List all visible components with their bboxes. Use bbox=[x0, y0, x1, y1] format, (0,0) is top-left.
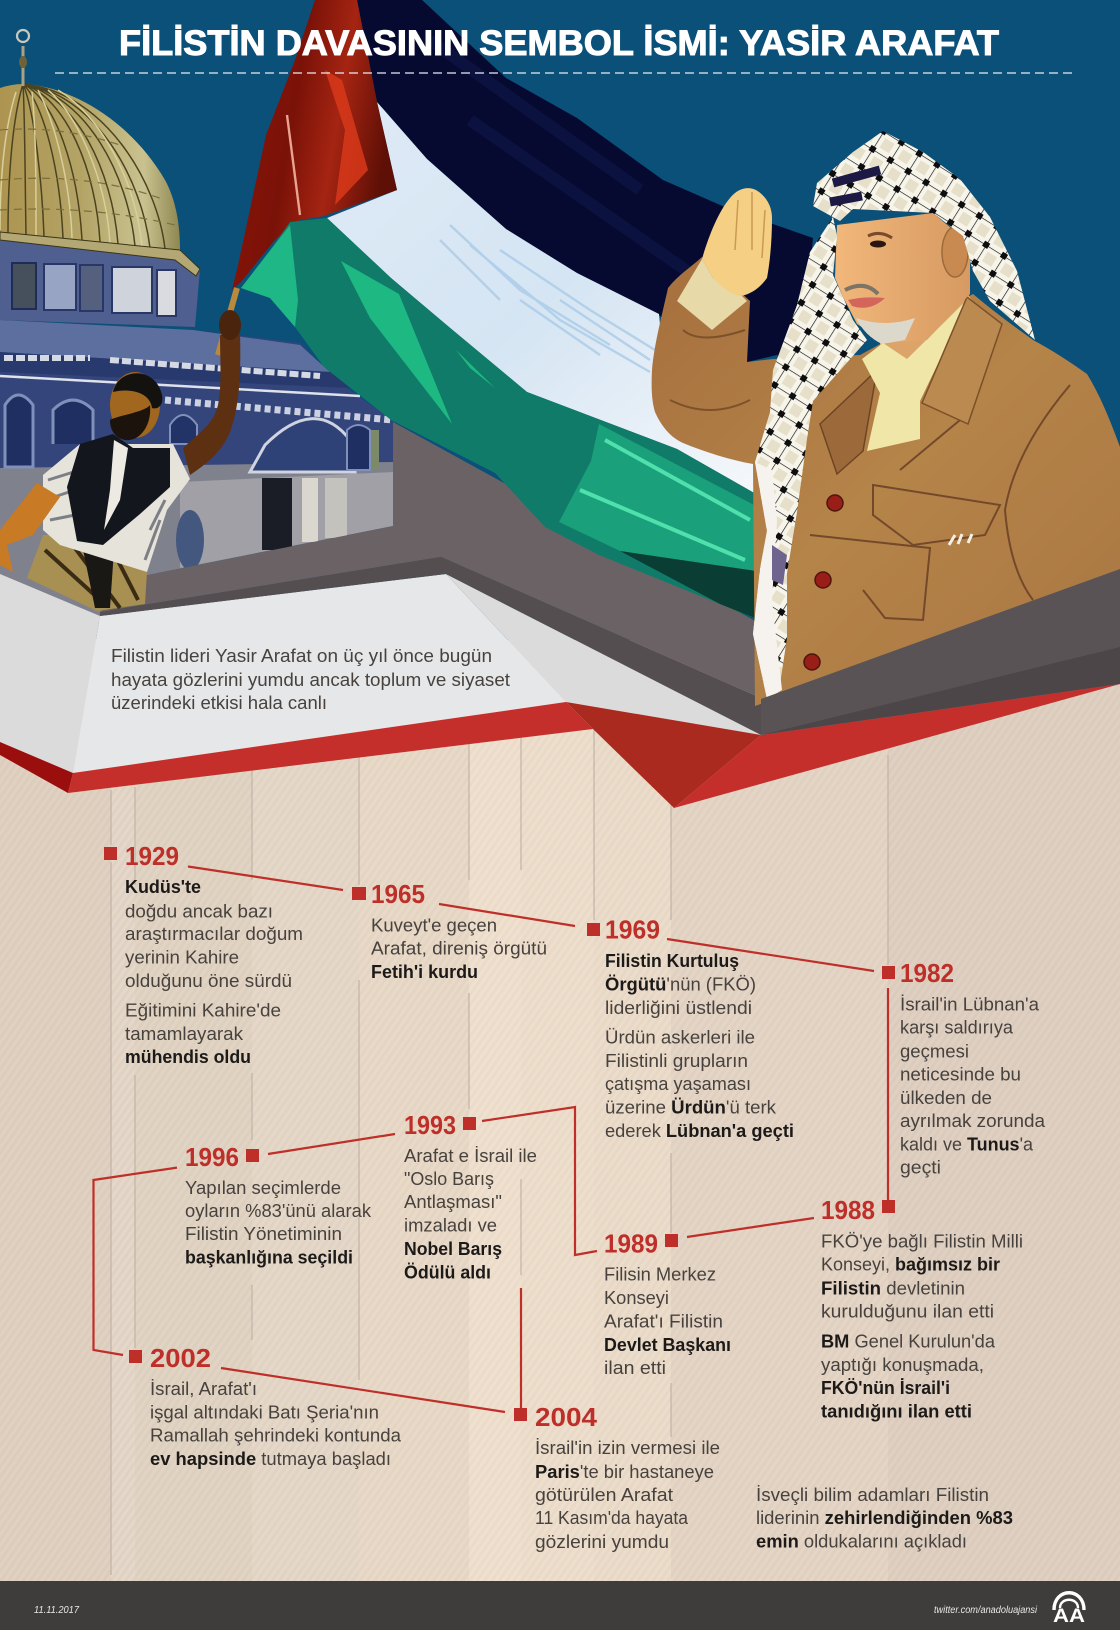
timeline event: 1988: Filistin devletinin bbox=[821, 1278, 965, 1298]
timeline event: 1989: 1989 bbox=[604, 1228, 658, 1258]
timeline event: 1929: tamamlayarak bbox=[125, 1024, 244, 1044]
timeline event: 2004: gözlerini yumdu bbox=[535, 1532, 669, 1552]
timeline event: 1982: geçti bbox=[900, 1158, 941, 1178]
timeline event: 1988: BM Genel Kurulun'da bbox=[821, 1332, 996, 1352]
timeline event: 1982: İsrail'in Lübnan'a bbox=[900, 994, 1040, 1014]
intro text: üzerindeki etkisi hala canlı bbox=[111, 693, 327, 713]
portrait: raised hand bbox=[702, 188, 772, 296]
timeline event: 1982: karşı saldırıya bbox=[900, 1018, 1014, 1038]
text block: Swedish scientists note: İsveçli bilim adamları Filistin bbox=[756, 1485, 989, 1505]
timeline event: 1993: Antlaşması" bbox=[404, 1192, 502, 1212]
timeline event: 2004: İsrail'in izin vermesi ile bbox=[535, 1438, 720, 1458]
text block: Swedish scientists note: emin oldukalarını açıkladı bbox=[756, 1532, 967, 1552]
timeline event: 1989 bbox=[604, 1228, 731, 1378]
background: blue sky bbox=[0, 0, 1120, 760]
timeline event: 1982 bbox=[882, 958, 1046, 1178]
illustration: Palestinian flag bbox=[232, 0, 813, 625]
footer bar bbox=[0, 1581, 1120, 1630]
icon: Anadolu Agency logo: AA bbox=[1053, 1606, 1085, 1627]
timeline event: 1969: Filistin Kurtuluş bbox=[605, 951, 739, 971]
timeline event: 2002: ev hapsinde tutmaya başladı bbox=[150, 1449, 391, 1469]
man: flag pole bbox=[218, 288, 237, 355]
timeline event: 2004: Paris'te bir hastaneye bbox=[535, 1462, 714, 1482]
timeline event: 1993: Ödülü aldı bbox=[404, 1262, 491, 1282]
man: trousers bbox=[27, 535, 147, 611]
timeline event: 1982: neticesinde bu bbox=[900, 1064, 1021, 1084]
timeline event: 1993 bbox=[404, 1110, 537, 1282]
timeline event: 1969: Örgütü'nün (FKÖ) bbox=[605, 974, 756, 994]
portrait: keffiyeh top bbox=[813, 131, 1035, 340]
portrait: left lapel bbox=[820, 370, 877, 474]
timeline event: 1969: üzerine Ürdün'ü terk bbox=[605, 1098, 777, 1118]
timeline event: 1965: 1965 bbox=[371, 879, 425, 909]
timeline event: 1989: Devlet Başkanı bbox=[604, 1335, 731, 1355]
timeline event: 1988: 1988 bbox=[821, 1195, 875, 1225]
timeline event: 1965: Arafat, direniş örgütü bbox=[371, 938, 547, 958]
portrait: buttons bbox=[827, 495, 843, 511]
timeline event: 1988: kurulduğunu ilan etti bbox=[821, 1302, 994, 1322]
timeline event: 1989: Filisin Merkez bbox=[604, 1264, 716, 1284]
intro text: Filistin lideri Yasir Arafat on üç yıl önce bugün bbox=[111, 646, 492, 666]
timeline event: 1989: Konseyi bbox=[604, 1288, 669, 1308]
wall: dark band left bbox=[100, 557, 761, 735]
timeline event: 1989: ilan etti bbox=[604, 1358, 666, 1378]
timeline connector lines bbox=[94, 866, 888, 1412]
timeline event: 1929 bbox=[104, 841, 303, 1067]
timeline event: 2004 bbox=[514, 1402, 720, 1552]
title: FİLİSTİN DAVASININ SEMBOL İSMİ: YASİR ARAFAT bbox=[119, 24, 999, 63]
timeline event: 2004: götürülen Arafat bbox=[535, 1485, 673, 1505]
timeline event: 1965 bbox=[352, 879, 547, 982]
illustration: golden dome bbox=[0, 84, 200, 276]
timeline event: 1929: olduğunu öne sürdü bbox=[125, 971, 292, 991]
timeline event: 1988: FKÖ'nün İsrail'i bbox=[821, 1378, 950, 1398]
man: black vest bbox=[67, 434, 170, 545]
intro text: hayata gözlerini yumdu ancak toplum ve siyaset bbox=[111, 670, 510, 690]
timeline event: 2004: 2004 bbox=[535, 1402, 598, 1432]
timeline event: 1929: Eğitimini Kahire'de bbox=[125, 1000, 281, 1020]
portrait: jacket seams and pockets bbox=[810, 325, 1070, 620]
timeline event: 1982: ayrılmak zorunda bbox=[900, 1111, 1046, 1131]
ribbon: red folded band bbox=[0, 684, 1120, 808]
timeline event: 1965: Kuveyt'e geçen bbox=[371, 916, 497, 936]
timeline event: 1969: ederek Lübnan'a geçti bbox=[605, 1121, 794, 1141]
portrait: right lapel bbox=[922, 297, 1002, 424]
man: striped shirt bbox=[43, 444, 190, 572]
footer: date: 11.11.2017 bbox=[34, 1605, 79, 1616]
timeline event: 1996: oyların %83'ünü alarak bbox=[185, 1201, 372, 1221]
portrait: face bbox=[835, 213, 970, 343]
illustration: dome drum with tile panels bbox=[0, 232, 200, 327]
icon: Anadolu Agency logo bbox=[1053, 1593, 1085, 1627]
timeline event: 2004: 11 Kasım'da hayata bbox=[535, 1508, 689, 1528]
portrait: agal cord bbox=[830, 170, 880, 202]
timeline event: 1988 bbox=[821, 1195, 1023, 1422]
panel: white intro panel bbox=[0, 574, 761, 773]
timeline event: 1969: liderliğini üstlendi bbox=[605, 998, 752, 1018]
timeline event: 1993: imzaladı ve bbox=[404, 1216, 497, 1236]
portrait: ear bbox=[942, 227, 968, 277]
timeline event: 1982: geçmesi bbox=[900, 1042, 969, 1062]
portrait: jacket bbox=[652, 257, 1120, 706]
flag: black band bbox=[357, 0, 813, 370]
timeline event: 1988: tanıdığını ilan etti bbox=[821, 1402, 972, 1422]
intro text bbox=[111, 646, 510, 713]
man: head and beard bbox=[110, 372, 160, 438]
timeline event: 2002: 2002 bbox=[150, 1343, 211, 1373]
icon: dome finial with crescent bbox=[17, 30, 29, 86]
timeline event: 1929: Kudüs'te bbox=[125, 877, 201, 897]
background: beige striped timeline panel bbox=[0, 640, 1120, 1585]
timeline event: 1965: Fetih'i kurdu bbox=[371, 962, 478, 982]
portrait: shirt bbox=[862, 297, 970, 451]
timeline event: 1929: doğdu ancak bazı bbox=[125, 902, 273, 922]
timeline event: 1993: Arafat e İsrail ile bbox=[404, 1146, 537, 1166]
timeline event: 1969: çatışma yaşaması bbox=[605, 1074, 751, 1094]
timeline event: 1929: mühendis oldu bbox=[125, 1047, 251, 1067]
wall: dark band right bbox=[761, 569, 1120, 735]
timeline event: 1929: araştırmacılar doğum bbox=[125, 924, 303, 944]
timeline event: 1988: yaptığı konuşmada, bbox=[821, 1355, 984, 1375]
flag: white band bbox=[327, 102, 770, 494]
flag: green band bbox=[241, 218, 770, 625]
timeline event: 1982: ülkeden de bbox=[900, 1088, 992, 1108]
man: raised arm bbox=[183, 333, 240, 475]
portrait: Yasser Arafat bbox=[652, 131, 1120, 706]
timeline event: 1993: "Oslo Barış bbox=[404, 1169, 494, 1189]
timeline event: 1988: Konseyi, bağımsız bir bbox=[821, 1254, 1000, 1274]
portrait: keffiyeh falling scarf bbox=[753, 217, 867, 699]
timeline event: 1996: 1996 bbox=[185, 1142, 239, 1172]
timeline event: 1996: başkanlığına seçildi bbox=[185, 1248, 353, 1268]
timeline event: 1969: Ürdün askerleri ile bbox=[605, 1028, 755, 1048]
timeline event: 1989: Arafat'ı Filistin bbox=[604, 1312, 723, 1332]
portrait: beard bbox=[856, 318, 915, 344]
illustration: mosque building bbox=[0, 320, 393, 622]
timeline event: 1993: 1993 bbox=[404, 1110, 456, 1140]
text block: Swedish scientists note bbox=[756, 1485, 1013, 1552]
man: lowered arm bbox=[0, 483, 60, 572]
timeline event: 1996: Filistin Yönetiminin bbox=[185, 1224, 342, 1244]
illustration: man waving the flag bbox=[0, 288, 241, 611]
text block: Swedish scientists note: liderinin zehirlendiğinden %83 bbox=[756, 1508, 1013, 1528]
timeline event: 1982: kaldı ve Tunus'a bbox=[900, 1134, 1034, 1154]
portrait: eye, brow, mouth bbox=[868, 233, 892, 238]
timeline event: 1996 bbox=[185, 1142, 372, 1268]
portrait: raised hand cuff bbox=[677, 259, 747, 330]
timeline event: 1969 bbox=[587, 914, 794, 1141]
illustration: grey wall bbox=[100, 422, 790, 720]
timeline event: 2002: İsrail, Arafat'ı bbox=[150, 1379, 257, 1399]
timeline event: 2002 bbox=[129, 1343, 402, 1469]
timeline event: 2002: Ramallah şehrindeki kontunda bbox=[150, 1426, 402, 1446]
timeline event: 1993: Nobel Barış bbox=[404, 1239, 502, 1259]
timeline event: 1929: yerinin Kahire bbox=[125, 948, 239, 968]
portrait: neck bbox=[880, 290, 972, 362]
timeline event: 1996: Yapılan seçimlerde bbox=[185, 1178, 341, 1198]
flag: red band bbox=[232, 0, 397, 290]
timeline event: 1982: 1982 bbox=[900, 958, 954, 988]
footer: twitter handle: twitter.com/anadoluajansi bbox=[934, 1605, 1038, 1616]
timeline event: 1969: 1969 bbox=[605, 914, 660, 944]
title dashed divider bbox=[55, 72, 1073, 74]
timeline event: 1929: 1929 bbox=[125, 841, 179, 871]
timeline event: 2002: işgal altındaki Batı Şeria'nın bbox=[150, 1402, 379, 1422]
timeline event: 1988: FKÖ'ye bağlı Filistin Milli bbox=[821, 1232, 1023, 1252]
timeline event: 1969: Filistinli grupların bbox=[605, 1051, 748, 1071]
